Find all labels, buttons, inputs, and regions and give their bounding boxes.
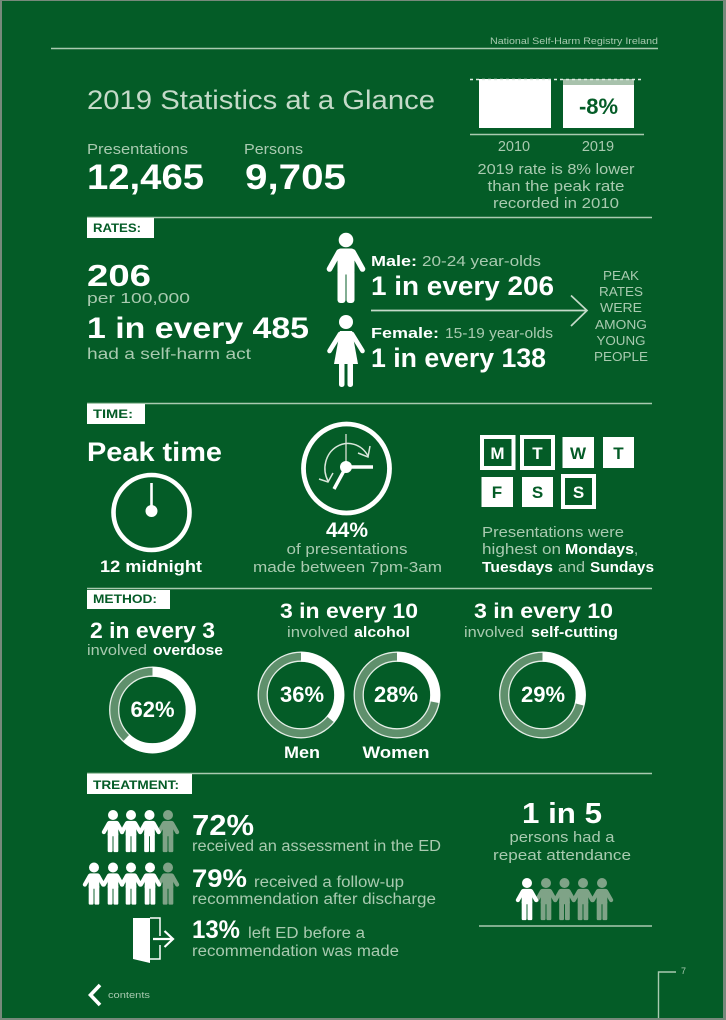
female rate: 15-19 year-olds: [445, 325, 553, 342]
section label: time: [87, 404, 145, 424]
text: highest days: ,: [634, 541, 638, 558]
stat: 13%: left ED before a: [248, 925, 365, 942]
male rate: [371, 253, 554, 301]
stat: repeat attendance: [493, 798, 631, 864]
weekday grid: T: [532, 444, 543, 463]
donut: men 36%: [258, 652, 344, 738]
stat: persons: [244, 142, 346, 197]
bar chart: 2010 vs 2019 rate: -8%: [579, 94, 618, 119]
section label: method: [87, 590, 170, 609]
stat: persons: Persons: [244, 142, 303, 158]
text: highest days: Mondays: [565, 541, 634, 558]
weekday grid: S: [532, 483, 543, 502]
female rate: [371, 325, 553, 373]
bar chart: 2010 vs 2019 rate: 2010: [498, 139, 530, 155]
section label: rates: RATES:: [93, 221, 141, 235]
text: highest days: and: [558, 559, 585, 576]
male rate: 20-24 year-olds: [422, 253, 541, 270]
weekday grid: S: [573, 483, 584, 502]
title: 2019 Statistics at a Glance: [87, 85, 435, 115]
text: highest days: [482, 524, 654, 576]
icon: five people, four highlighted: [85, 862, 177, 905]
page number: 7: [681, 966, 686, 976]
panel: rates: [87, 218, 648, 387]
female rate: 1 in every 138: [371, 343, 546, 373]
stat: 13%: 13%: [192, 916, 240, 944]
section label: treatment: TREATMENT:: [93, 778, 179, 792]
weekday grid: T: [613, 444, 624, 463]
donut: overdose 62%: [110, 667, 195, 753]
contents link: [90, 985, 150, 1005]
self-cutting heading: self-cutting: [531, 625, 618, 641]
section label: method: METHOD:: [93, 592, 157, 606]
page header: National Self-Harm Registry Ireland: [490, 36, 658, 47]
self-cutting heading: 3 in every 10: [474, 600, 613, 623]
panel: treatment: [85, 774, 652, 963]
icon: female figure: [330, 315, 362, 387]
weekday grid: [482, 437, 634, 507]
callout: peak rates: PEOPLE: [594, 349, 648, 364]
stat: repeat attendance: repeat attendance: [493, 847, 631, 864]
icon: midnight clock: [114, 475, 190, 550]
stat: 44%: of presentations: [286, 541, 408, 558]
stat: 79%: [192, 865, 436, 908]
male rate: Male:: [371, 253, 417, 270]
icon: male figure: [330, 233, 362, 303]
bar chart caption: [478, 162, 635, 212]
section label: treatment: [87, 774, 192, 794]
overall rate: per 100,000: [87, 290, 190, 307]
alcohol heading: 3 in every 10: [280, 600, 418, 623]
stat: presentations: Presentations: [87, 142, 188, 158]
donut: self-cutting 29%: 29%: [521, 682, 565, 707]
text: 12 midnight: 12 midnight: [100, 557, 202, 576]
stat: persons: 9,705: [245, 158, 346, 197]
self-cutting heading: [464, 600, 618, 641]
callout: peak rates: YOUNG: [596, 333, 646, 348]
page number: [658, 966, 686, 1018]
overdose heading: overdose: [153, 643, 223, 659]
overall rate: [87, 258, 309, 363]
stat: 13%: [192, 916, 399, 960]
alcohol heading: involved: [287, 625, 348, 641]
text: highest days: highest on: [482, 541, 561, 558]
panel: method: [87, 590, 618, 762]
overdose heading: involved: [87, 643, 147, 659]
weekday grid: F: [492, 483, 502, 502]
self-cutting heading: involved: [464, 625, 524, 641]
stat: 72%: received an assessment in the ED: [192, 838, 441, 855]
icon: four people, three highlighted: [104, 810, 177, 852]
heading: peak time: Peak time: [87, 437, 222, 467]
callout: peak rates: AMONG: [595, 317, 647, 332]
bar chart caption: than the peak rate: [488, 179, 624, 195]
stat: presentations: [87, 142, 204, 197]
weekday grid: W: [570, 444, 587, 463]
stat: 44%: 44%: [326, 519, 368, 542]
bar chart: 2010 vs 2019 rate: [470, 79, 644, 155]
stat: 44%: [253, 519, 442, 576]
stat: repeat attendance: persons had a: [510, 829, 615, 846]
callout: peak rates: RATES: [599, 284, 643, 299]
section label: time: TIME:: [93, 407, 133, 421]
icon: door with exit arrow: [133, 918, 173, 963]
overall rate: 1 in every 485: [87, 312, 309, 345]
stat: 79%: 79%: [192, 865, 247, 893]
weekday grid: M: [490, 444, 505, 463]
stat: 79%: recommendation after discharge: [192, 891, 436, 908]
donut: overdose 62%: 62%: [130, 697, 175, 722]
bar chart caption: 2019 rate is 8% lower: [478, 162, 635, 178]
donut: women 28%: [354, 652, 440, 738]
contents link: contents: [108, 990, 150, 1001]
overall rate: 206: [87, 258, 151, 293]
text: highest days: Tuesdays: [482, 559, 553, 576]
section label: rates: [87, 218, 154, 238]
callout: peak rates: [594, 268, 648, 364]
male rate: 1 in every 206: [371, 271, 554, 301]
donut: women 28%: 28%: [374, 682, 418, 707]
stat: 72%: [192, 810, 441, 855]
overall rate: had a self-harm act: [87, 346, 252, 363]
text: highest days: Presentations were: [482, 524, 624, 541]
label: men: Men: [284, 743, 320, 762]
icon: five people, one highlighted: [518, 878, 611, 920]
female rate: Female:: [371, 325, 439, 342]
overdose heading: [87, 618, 223, 659]
alcohol heading: alcohol: [354, 625, 410, 641]
stat: repeat attendance: 1 in 5: [522, 798, 602, 830]
bar chart caption: recorded in 2010: [493, 196, 619, 212]
bar chart: 2010 vs 2019 rate: 2019: [582, 139, 614, 155]
stat: 79%: received a follow-up: [254, 874, 404, 891]
stat: 13%: recommendation was made: [192, 943, 399, 960]
panel: time: [87, 404, 654, 576]
text: highest days: Sundays: [590, 559, 654, 576]
overdose heading: 2 in every 3: [90, 618, 215, 643]
stat: presentations: 12,465: [87, 158, 204, 197]
icon: evening clock: [304, 424, 390, 513]
donut: men 36%: 36%: [280, 682, 324, 707]
callout: peak rates: PEAK: [603, 268, 639, 283]
donut: self-cutting 29%: [500, 652, 585, 738]
arrow: [371, 296, 587, 326]
callout: peak rates: WERE: [600, 300, 642, 315]
stat: 72%: 72%: [192, 810, 254, 842]
stat: 44%: made between 7pm-3am: [253, 559, 442, 576]
alcohol heading: [280, 600, 418, 641]
label: women: Women: [362, 743, 430, 762]
panel: summary: [87, 79, 644, 212]
